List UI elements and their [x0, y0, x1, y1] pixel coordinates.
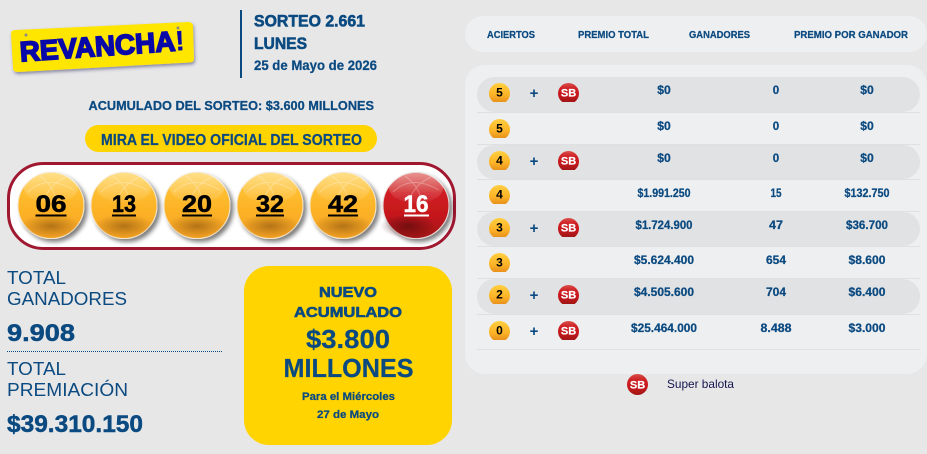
row: 5 + SB: SB [561, 88, 576, 100]
row: 5: $0 [657, 121, 671, 133]
row: 5: 5 [496, 122, 503, 136]
row: 5 + SB: $0 [657, 85, 671, 97]
row: 5: $0 [860, 121, 874, 133]
new jackpot card: NUEVO [319, 285, 377, 301]
total winners: GANADORES [7, 289, 127, 309]
row: 2 + SB: + [530, 287, 539, 304]
new jackpot card [244, 266, 452, 445]
row: 3 + SB: 47 [769, 220, 783, 232]
row: 2 + SB: $6.400 [848, 287, 886, 299]
row: 0 + SB: $3.000 [848, 323, 886, 335]
row: 2 + SB: 2 [496, 288, 503, 302]
table header: PREMIO POR GANADOR [794, 30, 909, 41]
draw info: 25 de Mayo de 2026 [254, 58, 377, 73]
row: 4: $132.750 [844, 188, 890, 200]
draw info [254, 12, 377, 73]
ball 32 [237, 172, 303, 238]
row: 3: $8.600 [848, 255, 886, 267]
draw info: LUNES [254, 35, 307, 53]
row: 4: 15 [770, 188, 782, 200]
row: 4 + SB: + [530, 153, 539, 170]
row: 2 + SB: $4.505.600 [634, 287, 694, 299]
row: 0 + SB: + [530, 323, 539, 340]
ball 13: 13 [112, 191, 136, 218]
ball 32: 32 [256, 191, 284, 218]
draw info: SORTEO 2.661 [254, 12, 365, 30]
table header: GANADORES [689, 30, 750, 41]
row: 4 + SB: $0 [860, 153, 874, 165]
ball 20: 20 [182, 191, 212, 218]
row: 4 [489, 185, 890, 204]
new jackpot card: MILLONES [284, 353, 414, 383]
row: 5 + SB [489, 83, 874, 102]
ball 06: 06 [36, 191, 66, 218]
row: 3 + SB: SB [561, 222, 576, 234]
row: 3 + SB: + [530, 220, 539, 237]
accumulated text: ACUMULADO DEL SORTEO: $3.600 MILLONES [88, 99, 374, 113]
row: 5 + SB: 0 [773, 85, 779, 97]
legend: super balota: SB [630, 380, 645, 392]
row: 3: 654 [766, 255, 787, 267]
new jackpot card: 27 de Mayo [317, 409, 379, 421]
row: 5 + SB: $0 [860, 85, 874, 97]
row: 2 + SB [489, 285, 886, 304]
row: 4 + SB: $0 [657, 153, 671, 165]
row: 0 + SB: SB [561, 326, 576, 338]
table header [465, 16, 927, 52]
row: 4 + SB [489, 151, 874, 170]
total prize: TOTAL [7, 359, 66, 379]
logo: Revancha sign: REVANCHA! [19, 25, 186, 67]
ball 20 [164, 172, 230, 238]
row: 4 + SB: 4 [496, 154, 503, 168]
row: 3 [489, 253, 886, 272]
row: 0 + SB [489, 321, 886, 340]
row: 3: 3 [496, 256, 503, 270]
video button: MIRA EL VIDEO OFICIAL DEL SORTEO [101, 132, 362, 149]
row: 4 + SB: SB [561, 156, 576, 168]
ball 06 [18, 172, 84, 238]
ball 16 super balota [380, 172, 449, 238]
winning numbers panel [8, 164, 454, 248]
ball 42 [310, 172, 376, 238]
row: 3 + SB: 3 [496, 220, 503, 234]
total winners: 9.908 [7, 320, 75, 347]
row: 3 + SB: $1.724.900 [636, 220, 692, 232]
row: 0 + SB: 0 [496, 324, 503, 338]
row: 3 + SB: $36.700 [846, 220, 888, 232]
total winners: TOTAL [7, 268, 66, 288]
table header: ACIERTOS [487, 30, 535, 41]
row: 5 + SB: 5 [496, 86, 503, 100]
row: 4 + SB: 0 [773, 153, 779, 165]
ball 16 super balota: 16 [404, 191, 428, 218]
legend: super balota [627, 374, 734, 395]
total prize: $39.310.150 [7, 411, 143, 438]
legend: super balota: Super balota [667, 377, 734, 391]
new jackpot card: ACUMULADO [294, 305, 402, 321]
video button [85, 125, 377, 152]
row: 3: $5.624.400 [634, 255, 694, 267]
table header: PREMIO TOTAL [578, 30, 649, 41]
row: 2 + SB: 704 [766, 287, 787, 299]
row: 0 + SB: 8.488 [760, 323, 792, 335]
row: 4: $1.991.250 [638, 188, 690, 200]
ball 42: 42 [328, 191, 358, 218]
ball 13 [91, 172, 157, 238]
results table panel [465, 65, 927, 374]
row: 5: 0 [773, 121, 779, 133]
row: 3 + SB [489, 218, 888, 237]
row: 0 + SB: $25.464.000 [631, 323, 697, 335]
new jackpot card: $3.800 [306, 324, 390, 354]
row: 5 [489, 119, 874, 138]
new jackpot card: Para el Miércoles [302, 391, 395, 403]
divider: header vertical line [240, 10, 242, 78]
total winners [7, 268, 127, 347]
total prize [7, 359, 143, 438]
row: 4: 4 [496, 188, 503, 202]
row: 2 + SB: SB [561, 290, 576, 302]
total prize: PREMIACIÓN [7, 379, 128, 400]
row: 5 + SB: + [530, 85, 539, 102]
